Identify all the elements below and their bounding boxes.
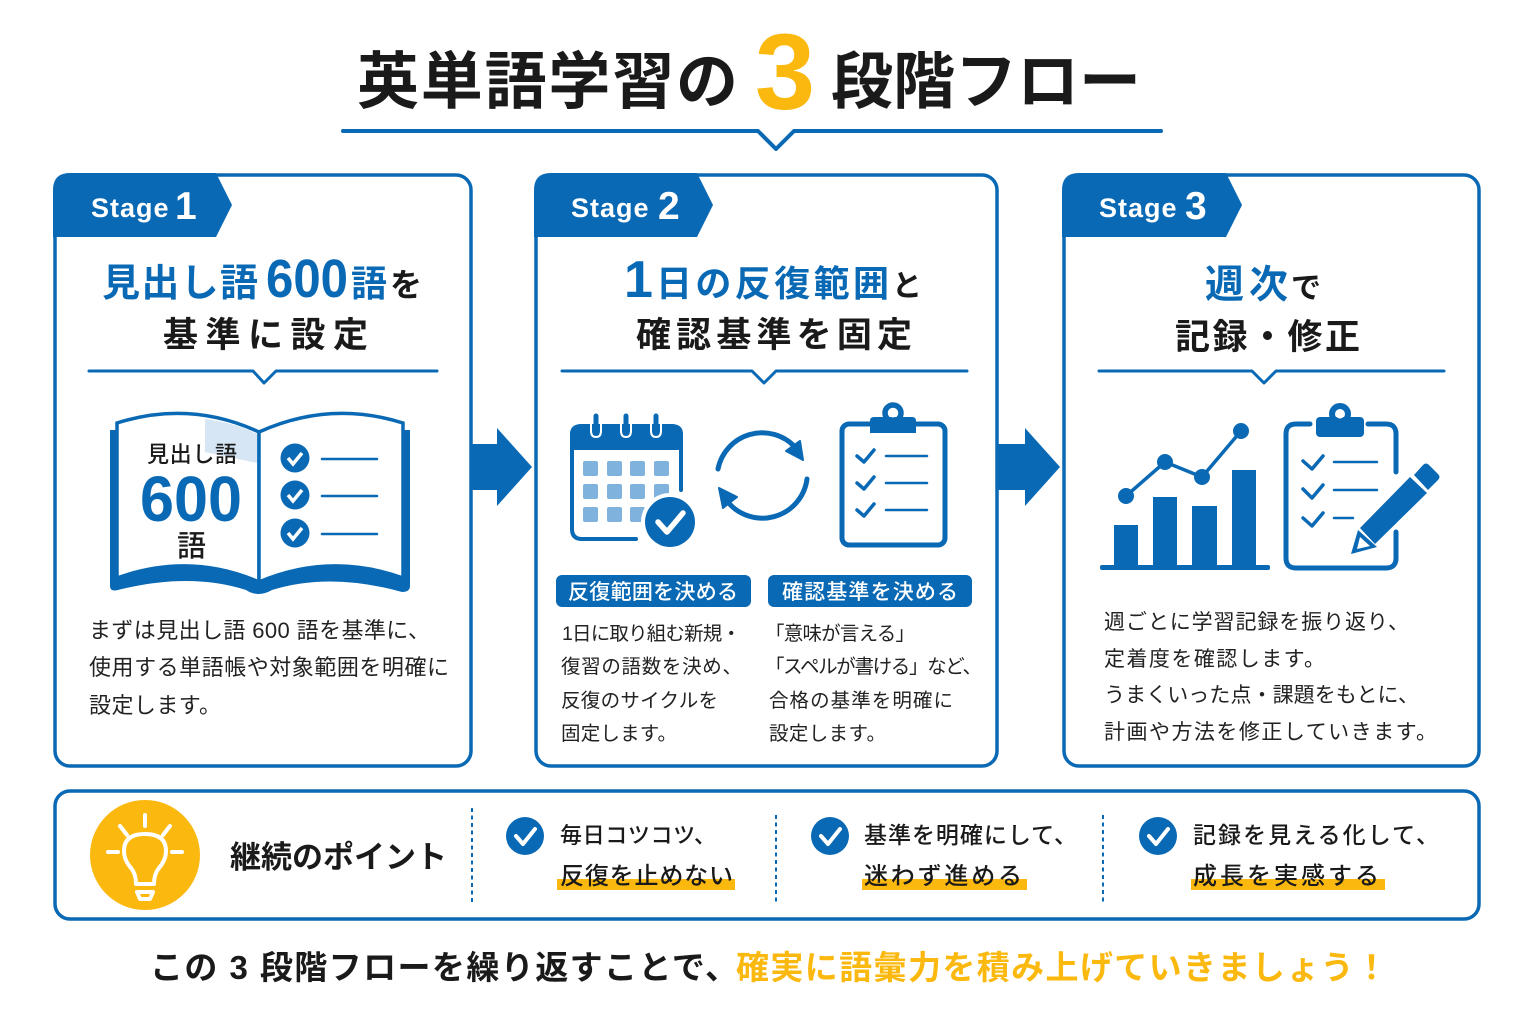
label: 確認基準を決める [768, 575, 972, 607]
icon: clipboard checklist [842, 405, 945, 545]
stage 2 tab: 2 [658, 185, 680, 228]
stage 1 tab: 1 [175, 185, 197, 228]
stage 3 heading: 週次 [1205, 264, 1288, 307]
label: 反復範囲を決める [556, 575, 751, 607]
stage 3 body text: 週ごとに学習記録を振り返り、 [1104, 611, 1409, 634]
stage 3 body text [1104, 611, 1437, 744]
icon: open book [110, 413, 410, 594]
point 3: 成長を実感する [1193, 862, 1379, 890]
stage 3 body text: うまくいった点・課題をもとに、 [1104, 684, 1419, 707]
stage 2 tab: Stage [571, 193, 650, 223]
point 1: 反復を止めない [560, 863, 733, 890]
title underline with notch [343, 131, 1161, 149]
title [357, 11, 1141, 132]
stage 3 body text: 定着度を確認します。 [1104, 648, 1325, 671]
closing message [150, 949, 1388, 986]
arrow 2 [997, 428, 1060, 506]
stage 3 heading: 記録・修正 [1175, 318, 1360, 357]
panel: stage 3 [1062, 173, 1479, 766]
icon: open book: 語 [177, 531, 206, 563]
stage 3 tab: Stage [1099, 193, 1178, 223]
point 2: 基準を明確にして、 [864, 822, 1077, 848]
stage 2 right text [765, 623, 982, 745]
stage 1 body text: 設定します。 [89, 693, 221, 718]
stage 2 right text: 「スペルが書ける」など、 [765, 656, 982, 678]
closing message: 確実に語彙力を積み上げていきましょう！ [736, 949, 1388, 986]
stage 2 right text: 合格の基準を明確に [769, 690, 953, 712]
stage 1 heading: を [390, 267, 422, 303]
label: 確認基準を決める: 確認基準を決める [782, 581, 958, 604]
point 2 [811, 817, 1077, 890]
stage 2 heading: 確認基準を固定 [636, 316, 912, 355]
point 3 [1139, 817, 1439, 890]
stage 2 heading [624, 251, 922, 355]
arrow 1 [471, 428, 532, 506]
icon: cycle arrows [718, 433, 807, 518]
stage 1 body text: 使用する単語帳や対象範囲を明確に [89, 655, 449, 680]
stage 1 heading: 語 [351, 263, 387, 304]
title: 段階フロー [831, 48, 1141, 117]
stage 2 heading: 1 [624, 251, 653, 309]
label: 反復範囲を決める: 反復範囲を決める [568, 581, 738, 604]
stage 1 heading [102, 249, 422, 355]
stage 1 tab [53, 173, 232, 237]
stage 3 heading: で [1291, 272, 1321, 305]
point 1: 毎日コツコツ、 [560, 823, 716, 848]
stage 2 left text: 復習の語数を決め、 [561, 656, 742, 678]
stage 3 tab: 3 [1185, 185, 1207, 228]
panel: stage 1 [53, 173, 471, 766]
panel: stage 2 [534, 173, 997, 766]
stage 1 heading: 600 [266, 249, 348, 309]
stage 2 left text: 固定します。 [561, 723, 677, 745]
title: 3 [755, 11, 815, 132]
point 2: 迷わず進める [864, 863, 1022, 890]
stage 1 body text [89, 618, 449, 718]
check list [280, 444, 377, 548]
stage 3 body text: 計画や方法を修正していきます。 [1104, 721, 1437, 744]
icon: open book: 600 [140, 463, 242, 535]
stage 1 heading: 見出し語 [102, 263, 258, 305]
stage 3 heading [1175, 264, 1360, 357]
stage 2 left text [561, 623, 742, 745]
stage 3 tab [1062, 173, 1242, 237]
title: 英単語学習の [357, 48, 738, 117]
stage 2 tab [534, 173, 713, 237]
icon: calendar [570, 416, 699, 551]
stage 2 right text: 設定します。 [769, 723, 886, 745]
point 3: 記録を見える化して、 [1193, 822, 1439, 848]
icon: open book: 見出し語 [147, 442, 237, 467]
stage 2 heading: と [892, 270, 922, 303]
panel: continuation points [55, 791, 1479, 919]
stage 1 heading: 基準に設定 [163, 316, 368, 355]
stage 1 tab: Stage [91, 193, 170, 223]
heading: 継続のポイント: 継続のポイント [230, 840, 447, 875]
stage 2 right text: 「意味が言える」 [765, 623, 915, 645]
point 1 [506, 817, 735, 890]
stage 2 heading: 日の反復範囲 [656, 263, 889, 304]
icon: bar and line chart [1100, 423, 1270, 570]
stage 2 left text: 反復のサイクルを [561, 690, 718, 712]
stage 2 left text: 1日に取り組む新規・ [562, 623, 741, 645]
icon: clipboard and pencil [1286, 406, 1440, 568]
closing message: この 3 段階フローを繰り返すことで、 [150, 949, 738, 986]
stage 1 body text: まずは見出し語 600 語を基準に、 [89, 618, 430, 643]
icon: light bulb [90, 800, 200, 910]
